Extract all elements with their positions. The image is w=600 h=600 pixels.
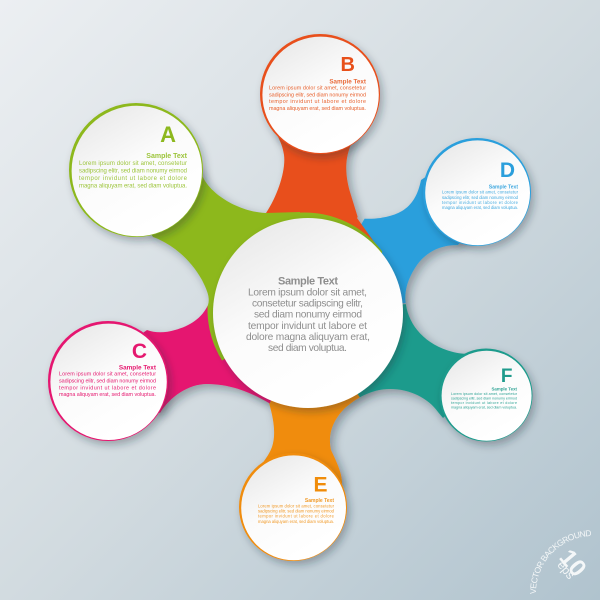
- heading F: Sample Text: [491, 386, 518, 392]
- text block A: [79, 161, 188, 190]
- text block B: magna aliquyam erat, sed diam voluptua.: [269, 106, 366, 112]
- circle C: [48, 321, 168, 441]
- central circle: [213, 218, 403, 408]
- circle B: [260, 34, 380, 154]
- text block F: magna aliquyam erat, sed diam voluptua.: [451, 406, 517, 410]
- text block F: [451, 392, 518, 410]
- vector background badge: VECTOR BACKGROUND: [530, 530, 591, 594]
- text block B: tempor invidunt ut labore et dolore: [269, 99, 366, 105]
- colored metaball connector arms: [142, 135, 474, 492]
- text block A: magna aliquyam erat, sed diam voluptua.: [79, 184, 187, 190]
- text block E: magna aliquyam erat, sed diam voluptua.: [258, 519, 334, 524]
- badge number: 10: [554, 544, 592, 582]
- text block B: Lorem ipsum dolor sit amet, consetetur: [269, 86, 366, 92]
- letter F: F: [501, 366, 512, 387]
- text block D: sadipscing elitr, sed diam nonumy eirmod: [442, 195, 519, 200]
- circle E: [239, 453, 347, 561]
- letter C: C: [132, 340, 147, 363]
- central text block: consetetur sadipscing elitr,: [252, 298, 363, 310]
- letter E: E: [313, 474, 328, 497]
- text block D: magna aliquyam erat, sed diam voluptua.: [442, 205, 518, 210]
- central text block: sed diam voluptua.: [268, 343, 347, 354]
- text block A: tempor invidunt ut labore et dolore: [79, 176, 188, 182]
- text block C: sadipscing elitr, sed diam nonumy eirmod: [59, 379, 156, 385]
- text block A: sadipscing elitr, sed diam nonumy eirmod: [79, 168, 187, 174]
- text block E: Lorem ipsum dolor sit amet, consetetur: [258, 504, 335, 508]
- text block E: [258, 504, 335, 524]
- text block F: sadipscing elitr, sed diam nonumy eirmod: [451, 396, 517, 400]
- text block C: tempor invidunt ut labore et dolore: [59, 386, 156, 392]
- central text block: sed diam nonumy eirmod: [254, 310, 362, 320]
- heading C: Sample Text: [119, 364, 157, 372]
- letter D: D: [500, 159, 515, 182]
- central text block: [246, 288, 370, 354]
- central text block: Lorem ipsum dolor sit amet,: [248, 288, 367, 298]
- text block A: Lorem ipsum dolor sit amet, consetetur: [79, 161, 187, 167]
- central text block: dolore magna aliquyam erat,: [246, 332, 370, 343]
- letter A: A: [160, 122, 176, 147]
- heading B: Sample Text: [329, 78, 367, 86]
- circle A: [69, 103, 203, 237]
- circle D: [423, 138, 531, 246]
- circle F: [440, 348, 532, 442]
- text block D: [442, 190, 519, 210]
- text block C: magna aliquyam erat, sed diam voluptua.: [59, 392, 156, 398]
- text block F: Lorem ipsum dolor sit amet, consetetur: [451, 392, 518, 396]
- text block D: Lorem ipsum dolor sit amet, consetetur: [442, 190, 519, 194]
- central heading: Sample Text: [278, 276, 338, 288]
- text block E: tempor invidunt ut labore et dolore: [258, 514, 335, 518]
- text block C: [59, 372, 156, 398]
- text block C: Lorem ipsum dolor sit amet, consetetur: [59, 372, 156, 378]
- text block E: sadipscing elitr, sed diam nonumy eirmod: [258, 508, 335, 514]
- letter B: B: [341, 54, 355, 76]
- text block B: sadipscing elitr, sed diam nonumy eirmod: [269, 92, 366, 98]
- heading E: Sample Text: [305, 498, 334, 504]
- heading A: Sample Text: [146, 153, 188, 160]
- badge eps: eps: [554, 558, 578, 582]
- text block F: tempor invidunt ut labore et dolore: [451, 401, 517, 405]
- central text block: tempor invidunt ut labore et: [248, 321, 367, 332]
- text block B: [269, 86, 366, 112]
- heading D: Sample Text: [489, 184, 518, 190]
- text block D: tempor invidunt ut labore et dolore: [442, 200, 519, 205]
